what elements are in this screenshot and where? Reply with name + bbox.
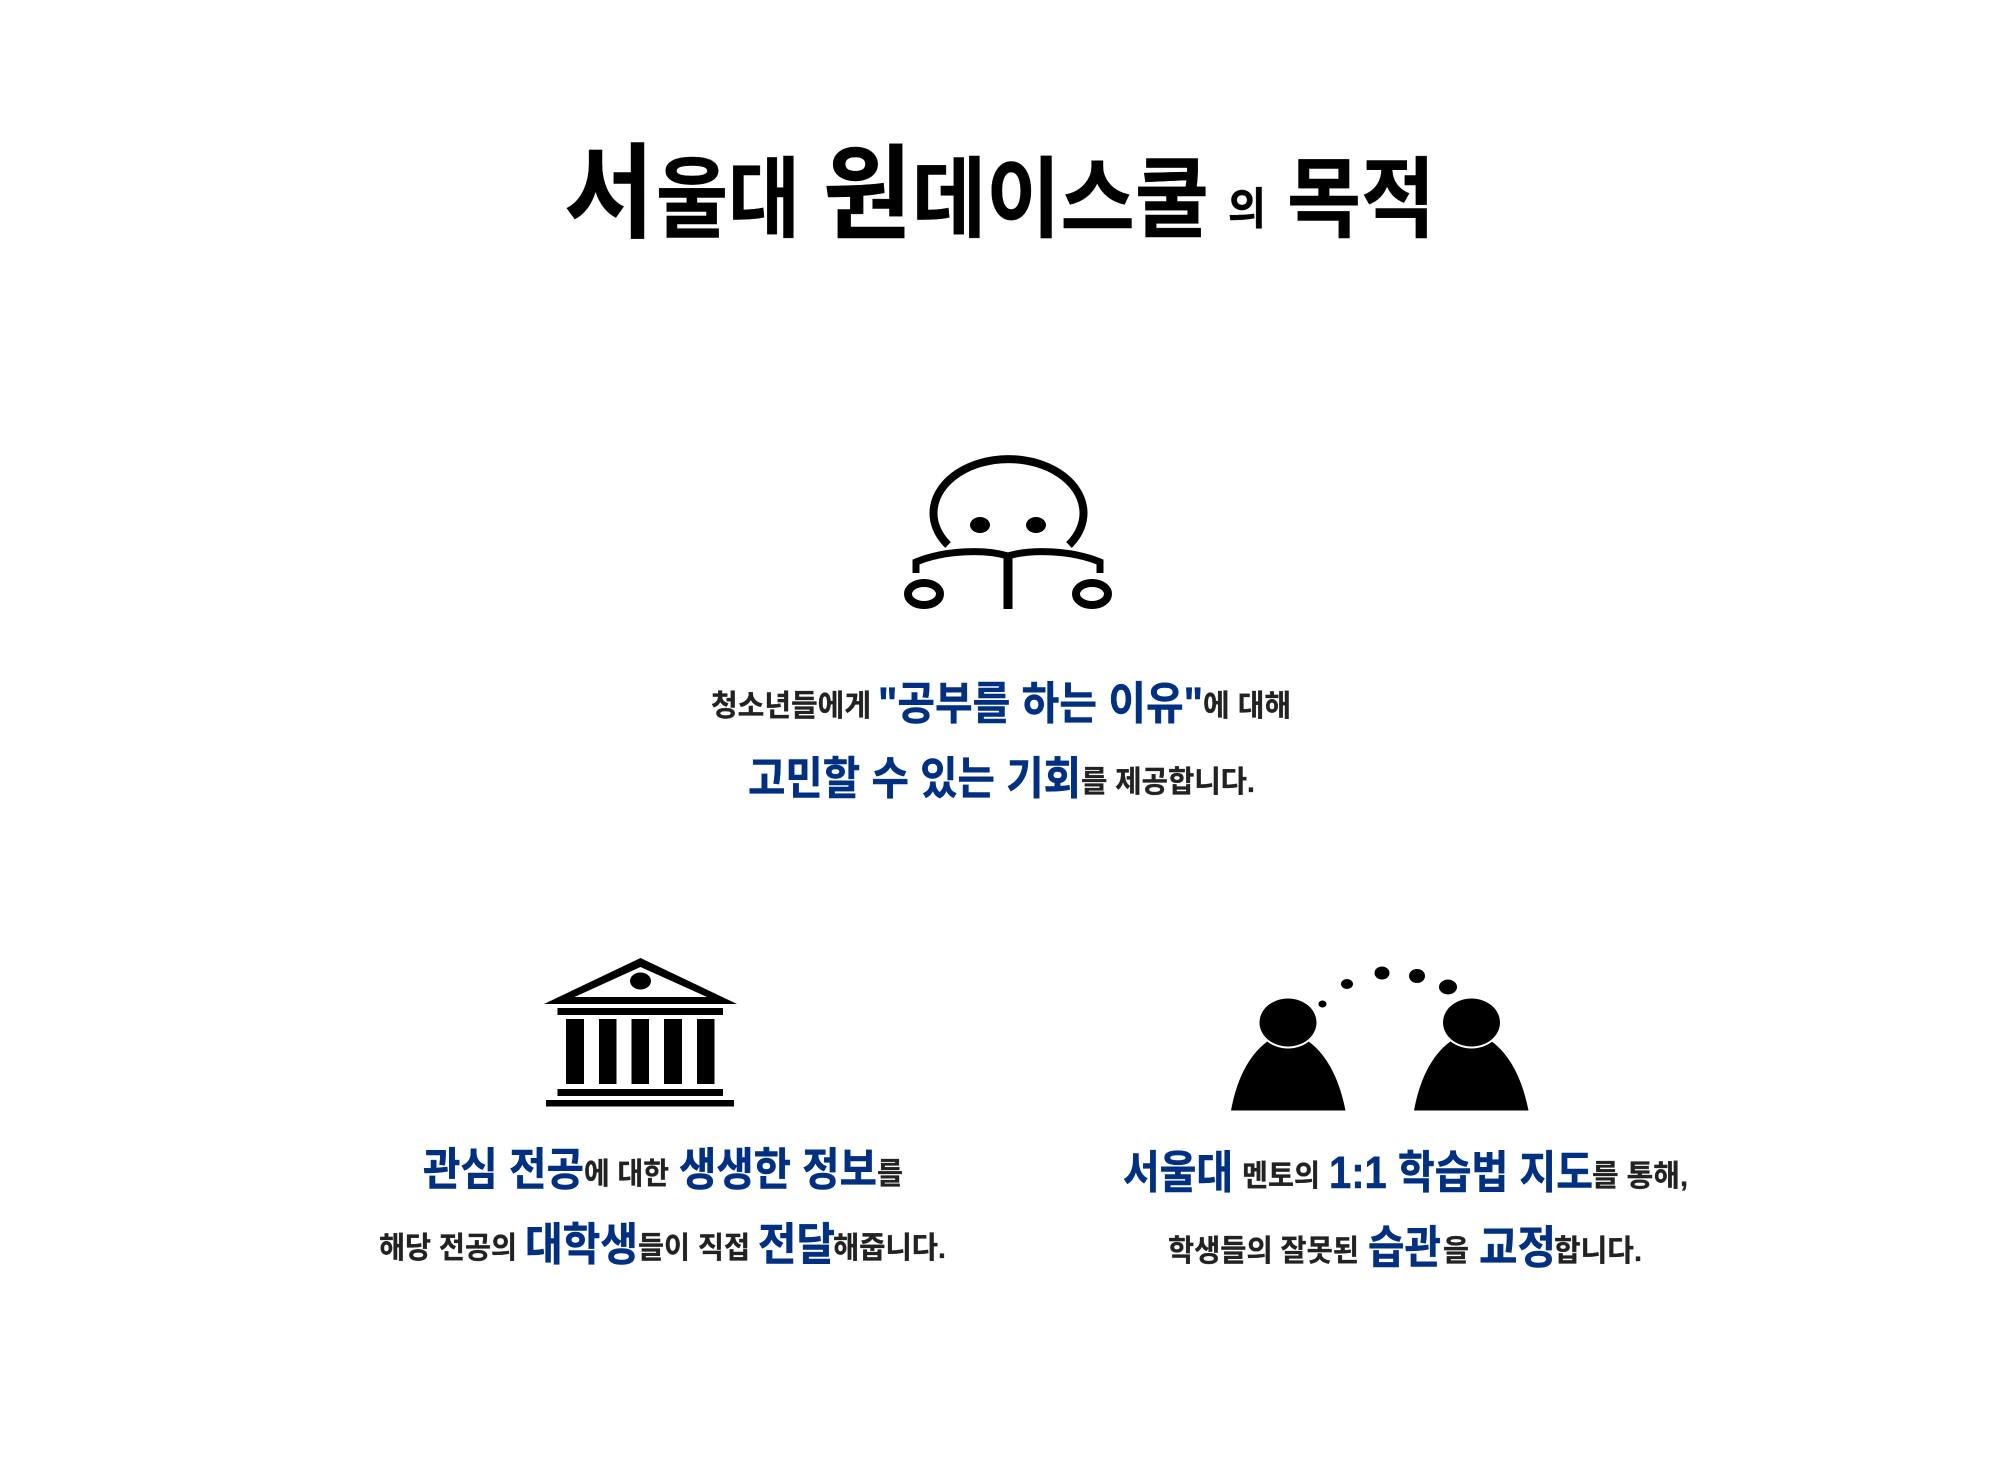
title: 울대 — [656, 150, 800, 249]
text block: one-on-one study mentoring — [1123, 1147, 1688, 1273]
title: 원 — [823, 137, 912, 252]
text block: one-on-one study mentoring: 멘토의 — [1242, 1160, 1320, 1193]
title: 서 — [564, 136, 654, 251]
title: 데이스쿨 — [912, 150, 1209, 249]
title: 의 — [1228, 185, 1266, 234]
text block: major information: 해줍니다. — [833, 1232, 946, 1265]
text block: one-on-one study mentoring: 를 통해, — [1592, 1160, 1688, 1193]
icon: person reading a book — [908, 459, 1108, 609]
text block: major information — [379, 1144, 946, 1270]
text block: major information: 에 대한 — [584, 1158, 669, 1191]
text block: major information: 관심 전공 — [423, 1144, 584, 1195]
text block: reason for studying: 고민할 수 있는 기회 — [748, 753, 1081, 804]
text block: one-on-one study mentoring: 1:1 학습법 지도 — [1329, 1147, 1593, 1198]
text block: one-on-one study mentoring: 을 — [1443, 1235, 1469, 1268]
text block: one-on-one study mentoring: 교정 — [1479, 1222, 1556, 1273]
text block: reason for studying: 를 제공합니다. — [1081, 766, 1255, 799]
text block: major information: 전달 — [758, 1219, 835, 1270]
text block: major information: 생생한 정보 — [679, 1144, 877, 1195]
text block: one-on-one study mentoring: 서울대 — [1123, 1147, 1233, 1198]
icon: university building — [544, 958, 737, 1106]
title: 목적 — [1287, 150, 1435, 249]
icon: two people in conversation — [1231, 966, 1528, 1110]
title — [564, 136, 1435, 252]
text block: reason for studying: 청소년들에게 — [711, 690, 871, 723]
text block: reason for studying: 에 대해 — [1203, 690, 1291, 723]
text block: reason for studying: "공부를 하는 이유" — [878, 678, 1203, 729]
text block: one-on-one study mentoring: 학생들의 잘못된 — [1168, 1235, 1359, 1268]
text block: one-on-one study mentoring: 습관 — [1368, 1222, 1441, 1273]
text block: one-on-one study mentoring: 합니다. — [1554, 1235, 1642, 1268]
text block: major information: 들이 직접 — [638, 1232, 750, 1265]
text block: major information: 를 — [877, 1158, 903, 1191]
text block: major information: 대학생 — [525, 1219, 638, 1270]
text block: reason for studying — [711, 678, 1291, 804]
text block: major information: 해당 전공의 — [379, 1232, 517, 1265]
